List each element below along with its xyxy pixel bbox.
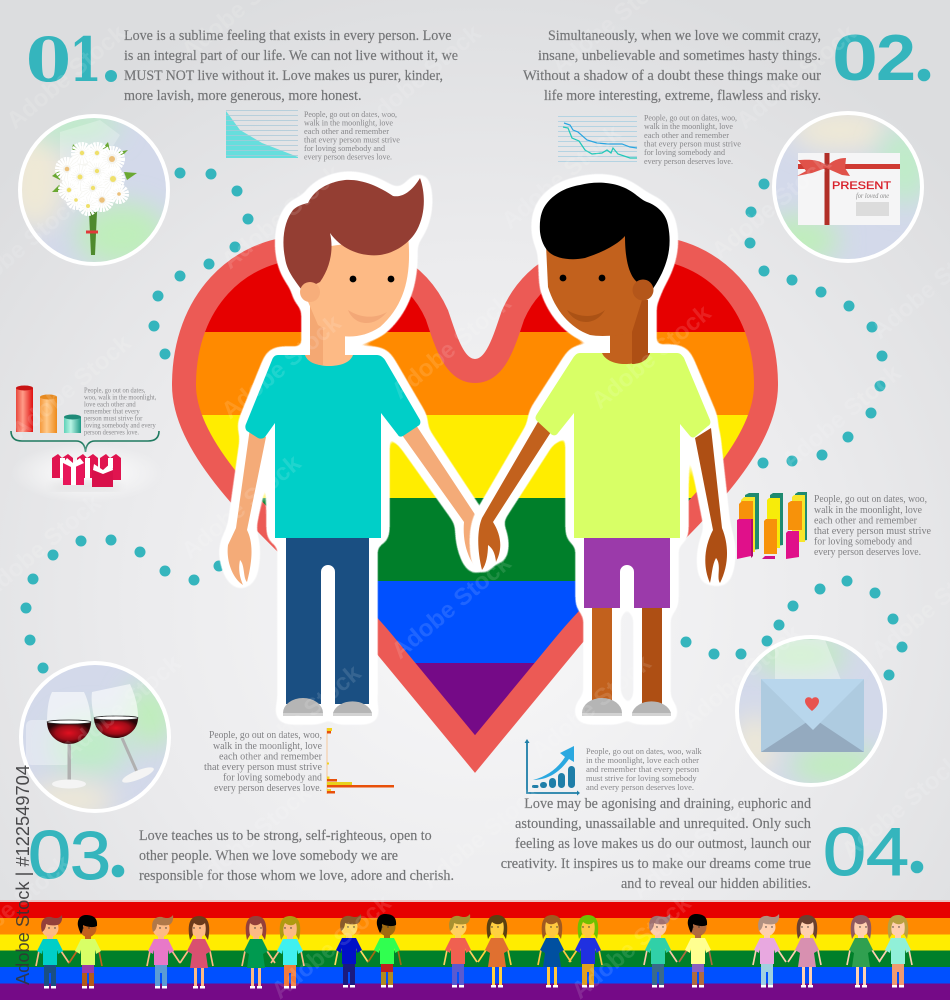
caption: area chart: each other and remember: [304, 126, 389, 136]
caption: rising arrow chart: [586, 746, 702, 792]
leaves: [52, 142, 137, 192]
bow: [797, 158, 850, 176]
card label: PRESENT: [832, 180, 891, 192]
caption: bar chart: every person deserves love.: [214, 783, 322, 794]
text block 3: Love teaches us to be strong, self-righteous, open to: [139, 828, 432, 844]
bracket: [11, 431, 159, 452]
smile: [348, 310, 387, 323]
caption: 3D bars: People, go out on dates, woo,: [814, 494, 927, 505]
caption: cylinder chart: woo, walk in the moonlight,: [84, 392, 156, 402]
people pair 8: [753, 914, 821, 988]
stock watermarks: Adobe Stock: [187, 779, 317, 895]
dotted path: top right: [744, 178, 888, 468]
stock watermarks: Adobe Stock: [527, 649, 657, 765]
stock watermarks: Adobe Stock: [777, 359, 907, 475]
caption: rising arrow chart: and remember that every person: [586, 764, 700, 774]
number 02: 2: [876, 21, 916, 94]
neck: [305, 300, 353, 366]
bubble: present card: for loved one: [856, 192, 889, 200]
number 01: 0: [26, 25, 71, 96]
people pair 6: [538, 915, 602, 988]
text block 2: [523, 28, 821, 104]
caption: cylinder chart: remember that every: [84, 406, 140, 416]
number 03: [28, 817, 124, 894]
caption: line chart: for loving somebody and: [644, 147, 726, 157]
ear: [632, 280, 654, 300]
chart: area with grid lines: [226, 110, 298, 158]
daisies: [59, 146, 125, 212]
caption: rising arrow chart: in the moonlight, love each other: [586, 755, 699, 765]
caption: cylinder chart: love each other and: [84, 400, 136, 408]
number 04: 0: [823, 814, 866, 890]
caption: line chart: every person deserves love.: [644, 156, 733, 166]
number 02: [832, 21, 930, 94]
number 01: 1: [69, 25, 102, 96]
text block 1: Love is a sublime feeling that exists in every person. Love: [124, 28, 452, 44]
caption: bar chart: each other and remember: [219, 752, 323, 762]
chart: two declining lines: [558, 116, 637, 162]
text block 1: [124, 28, 458, 104]
number 04: 4: [866, 814, 909, 890]
stock watermarks: Adobe Stock: [417, 779, 547, 895]
stock watermarks: Adobe Stock: [707, 149, 837, 265]
text block 2: life more interesting, extreme, flawless and risky.: [544, 88, 821, 104]
text block 4: feeling as love makes us do our outmost, launch our: [515, 836, 811, 852]
caption: line chart: People, go out on dates, woo,: [644, 112, 737, 122]
people pair 4: [335, 914, 401, 988]
smile: [567, 310, 605, 322]
bubble: daisy bouquet: [18, 114, 170, 266]
stock watermarks: Adobe Stock: [177, 449, 307, 565]
text block 4: [501, 796, 812, 892]
caption: rising arrow chart: and every person deserves love.: [586, 782, 694, 792]
caption: cylinder chart: person deserves love.: [84, 428, 139, 436]
caption: cylinder chart: person must strive for: [84, 414, 143, 422]
stock watermarks: Adobe Stock: [217, 309, 347, 425]
caption: rising arrow chart: People, go out on dates, woo, walk: [586, 746, 702, 756]
chart: cylinders: [16, 386, 81, 433]
chart: rising arrow: [524, 739, 580, 796]
caption: line chart: that every person must strive: [644, 138, 741, 148]
hair: [283, 178, 424, 292]
people pair 5: [444, 914, 511, 988]
number 03: 0: [28, 817, 71, 893]
rainbow heart: [150, 220, 800, 763]
text block 1: more lavish, more generous, more honest.: [124, 88, 362, 104]
text block 4: Love may be agonising and draining, euphoric and: [524, 796, 812, 812]
people pair 1: [36, 915, 102, 988]
caption: line chart: each other and remember: [644, 130, 729, 140]
rainbow band: [0, 900, 950, 1000]
people pair 7: [644, 914, 712, 988]
caption: bar chart: People, go out on dates, woo,: [209, 730, 322, 741]
stock watermarks: Adobe Stock: [357, 19, 487, 135]
text block 1: is an integral part of our life. We can not live without it, we: [124, 48, 458, 64]
number 04: .: [912, 837, 923, 881]
dotted path: top left: [148, 168, 254, 360]
number 03: .: [113, 841, 124, 885]
stock ID vertical label: Adobe Stock | #122549704: [13, 765, 33, 985]
stock watermarks: Adobe Stock: [7, 329, 137, 445]
caption: area chart: every person deserves love.: [304, 152, 392, 162]
caption: bar chart: that every person must strive: [204, 762, 323, 773]
caption: bar chart: [204, 730, 323, 794]
eyes: [560, 275, 605, 281]
ear: [300, 282, 320, 302]
caption: rising arrow chart: must strive for loving somebody: [586, 773, 697, 783]
face: [303, 235, 409, 336]
text block 3: other people. When we love somebody we are: [139, 848, 398, 864]
caption: line chart: [644, 112, 741, 166]
number 02: 0: [832, 21, 878, 94]
number 01: .: [106, 53, 116, 88]
glass right: [92, 684, 155, 786]
text block 4: astounding, unassailable and unrequited. Only such: [515, 816, 811, 832]
stock watermarks: Adobe Stock: [2, 19, 132, 135]
number 01: [26, 25, 117, 96]
stock watermarks: Adobe Stock: [497, 119, 627, 235]
caption: area chart: walk in the moonlight, love: [304, 118, 393, 128]
bouquet stems and bow: [86, 212, 98, 255]
number 02: .: [919, 45, 930, 89]
number 03: 3: [70, 818, 111, 894]
caption: area chart: [304, 109, 400, 162]
neck: [602, 300, 650, 364]
text block 2: Simultaneously, when we love we commit crazy,: [548, 28, 821, 44]
caption: 3D bars: that every person must strive: [814, 526, 932, 537]
caption: 3D bars: for loving somebody and: [814, 536, 912, 548]
legs: [283, 535, 372, 716]
caption: bar chart: for loving somebody and: [223, 772, 322, 784]
stock watermarks: Adobe Stock: [627, 789, 757, 905]
dotted path: bottom right: [680, 576, 908, 680]
caption: bar chart: walk in the moonlight, love: [213, 741, 323, 752]
people pair 3: [242, 916, 304, 988]
text block 4: and to reveal our hidden abilities.: [621, 876, 811, 892]
chart: horizontal bars: [326, 728, 394, 794]
text block 3: responsible for those whom we love, adore and cherish.: [139, 868, 454, 884]
arms: [228, 425, 486, 585]
caption: 3D bars: walk in the moonlight, love: [814, 505, 923, 516]
arms: [478, 420, 727, 583]
text block 4: creativity. It inspires us to make our dreams come true: [501, 856, 811, 872]
caption: area chart: People, go out on dates, woo,: [304, 109, 397, 119]
text block 2: Without a shadow of a doubt these things make our: [523, 68, 821, 84]
lime shirt: [536, 353, 710, 538]
dotted path: bottom left: [20, 534, 224, 674]
text block 2: insane, unbelievable and sometimes hasty things.: [538, 48, 821, 64]
caption: 3D bars: [814, 494, 932, 558]
barcode: [856, 202, 889, 216]
number 04: [823, 814, 923, 890]
envelope body: [761, 679, 864, 752]
stock watermarks: Adobe Stock: [677, 619, 807, 735]
caption: 3D bars: each other and remember: [814, 516, 918, 526]
caption: cylinder chart: People, go out on dates,: [84, 386, 145, 394]
stock watermarks: Adobe Stock: [387, 289, 517, 405]
stock watermarks: Adobe Stock: [217, 159, 347, 275]
bubble: present card: [772, 111, 924, 263]
bubble: envelope: [735, 637, 885, 785]
face: [546, 225, 642, 336]
stock watermarks: Adobe Stock: [587, 299, 717, 415]
legs and shorts: [582, 535, 671, 716]
text block 1: MUST NOT live without it. Love makes us purer, kinder,: [124, 68, 443, 84]
caption: cylinder chart: [84, 386, 156, 436]
hair: [540, 183, 670, 290]
caption: area chart: for loving somebody and: [304, 143, 386, 153]
people pair 2: [147, 915, 213, 988]
teal shirt: [245, 355, 420, 538]
bubble: wine glasses: [21, 663, 175, 818]
eyes: [350, 276, 394, 282]
card: [798, 153, 900, 225]
text block 3: [139, 828, 454, 884]
stock watermarks: Adobe Stock: [57, 649, 187, 765]
caption: 3D bars: every person deserves love.: [814, 547, 921, 558]
people pair 9: [847, 915, 912, 988]
caption: line chart: walk in the moonlight, love: [644, 121, 733, 131]
heart seal: [805, 697, 819, 711]
figure: boy with black hair: [478, 183, 727, 716]
stock watermarks: Adobe Stock: [387, 549, 517, 665]
caption: area chart: that every person must strive: [304, 134, 400, 144]
chart: 3D stacked bars: [737, 492, 807, 559]
caption: cylinder chart: loving somebody and every: [84, 420, 156, 430]
gift boxes: [11, 443, 163, 503]
stock watermarks: Adobe Stock: [237, 659, 367, 775]
stock watermarks: Adobe Stock: [732, 19, 862, 135]
glass left: [47, 692, 91, 788]
figure: boy with brown hair: [228, 178, 486, 716]
